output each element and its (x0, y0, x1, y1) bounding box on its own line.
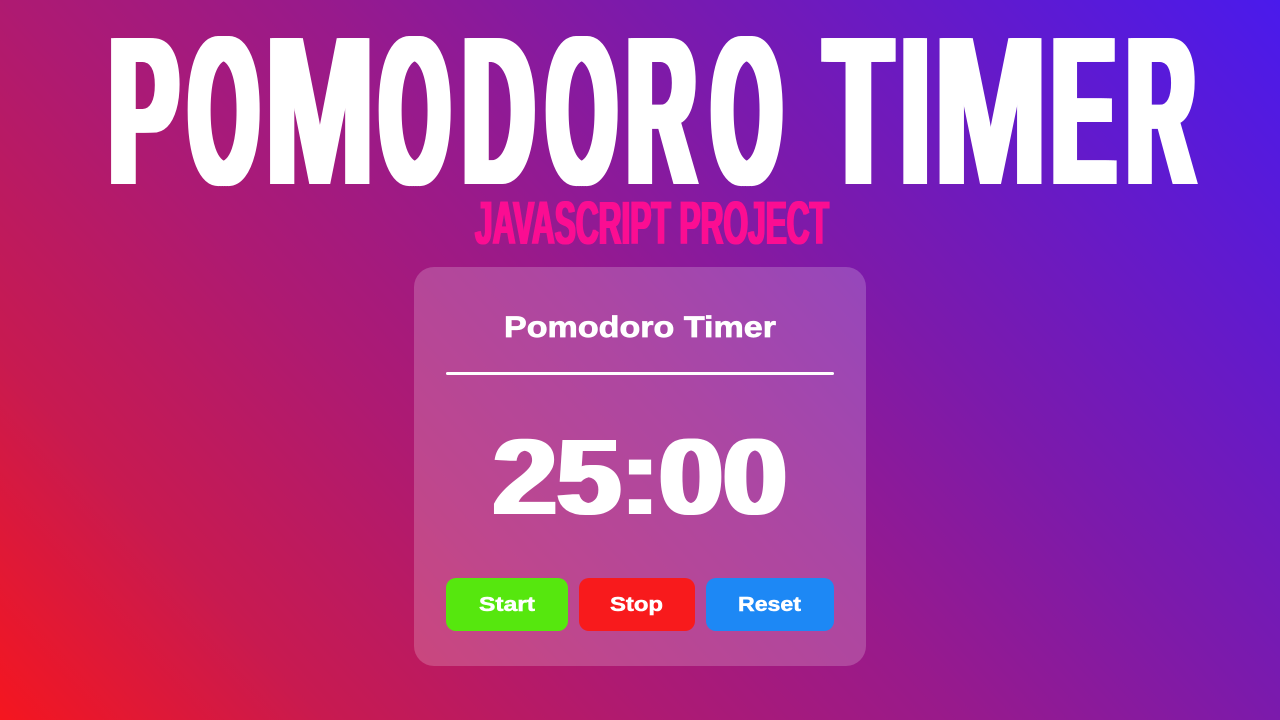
timer readout: 25:00 (493, 416, 787, 537)
button: stop: Stop (610, 594, 663, 616)
button: reset (706, 578, 834, 631)
button: start: Start (479, 594, 535, 616)
button: stop (579, 578, 695, 631)
button: reset: Reset (738, 594, 801, 616)
divider (446, 372, 834, 375)
card heading: Pomodoro Timer (504, 311, 776, 344)
title (109, 0, 1198, 228)
button: start (446, 578, 568, 631)
subtitle: JAVASCRIPT PROJECT (475, 189, 829, 257)
panel: timer card (414, 267, 866, 666)
